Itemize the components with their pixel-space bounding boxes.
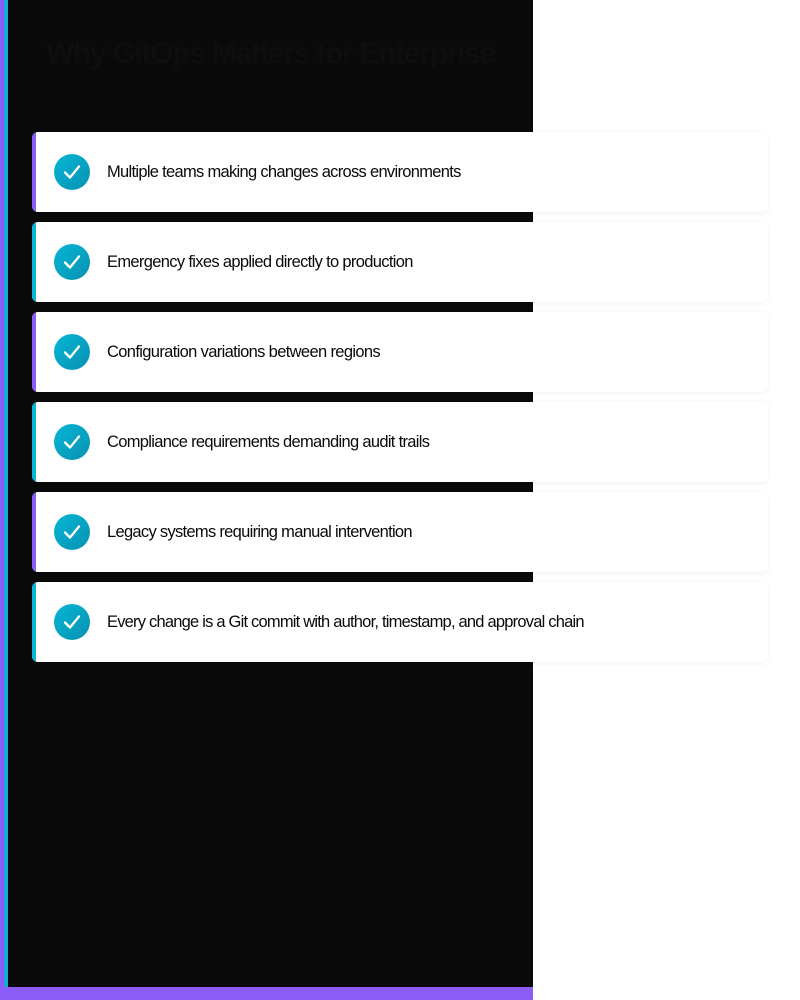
card: git commit bbox=[32, 582, 768, 662]
card: compliance bbox=[32, 402, 768, 482]
card text: Every change is a Git commit with author, timestamp, and approval chain bbox=[107, 613, 584, 631]
card: configuration variations bbox=[32, 312, 768, 392]
icon: check bbox=[54, 514, 90, 550]
title: Why GitOps Matters for Enterprise bbox=[46, 37, 495, 70]
icon: check bbox=[54, 154, 90, 190]
card accent bbox=[32, 312, 36, 392]
bottom accent bar bbox=[0, 987, 533, 1000]
card text: Emergency fixes applied directly to production bbox=[107, 253, 413, 271]
card accent bbox=[32, 582, 36, 662]
dark background panel bbox=[0, 0, 533, 1000]
icon: check bbox=[54, 334, 90, 370]
card text: Multiple teams making changes across environments bbox=[107, 163, 461, 181]
card text: Compliance requirements demanding audit trails bbox=[107, 433, 429, 451]
icon: check bbox=[54, 424, 90, 460]
card: emergency fixes bbox=[32, 222, 768, 302]
card accent bbox=[32, 132, 36, 212]
card accent bbox=[32, 492, 36, 572]
card: multiple teams bbox=[32, 132, 768, 212]
card accent bbox=[32, 402, 36, 482]
icon: check bbox=[54, 604, 90, 640]
card accent bbox=[32, 222, 36, 302]
icon: check bbox=[54, 244, 90, 280]
card text: Configuration variations between regions bbox=[107, 343, 380, 361]
card text: Legacy systems requiring manual intervention bbox=[107, 523, 412, 541]
card: legacy systems bbox=[32, 492, 768, 572]
left accent bar bbox=[0, 0, 8, 1000]
